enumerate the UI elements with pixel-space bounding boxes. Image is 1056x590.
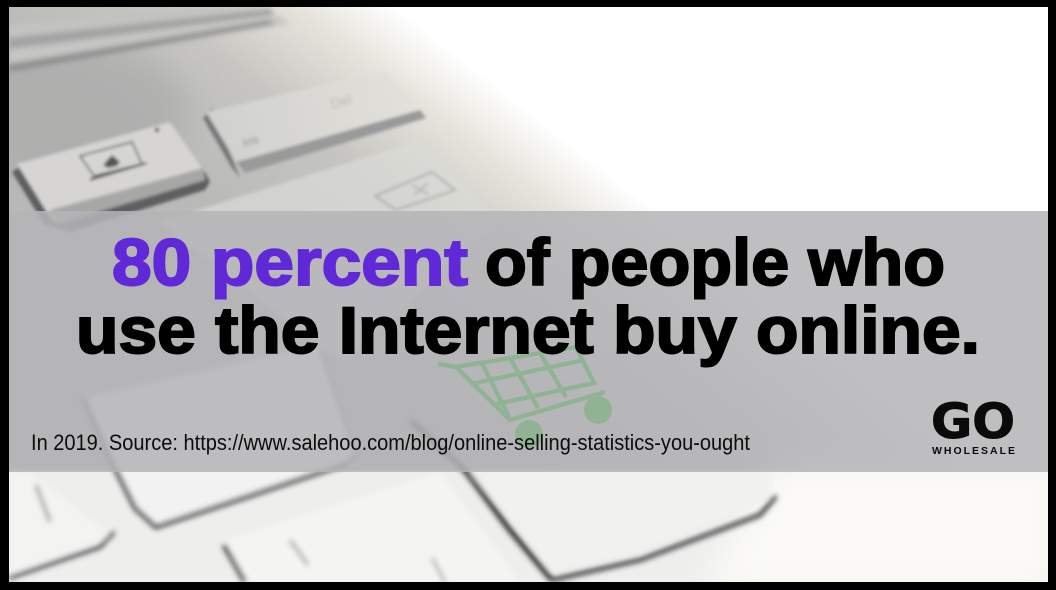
keyboard keys [9, 71, 776, 582]
key: lower left [9, 472, 114, 578]
key: screen toggle [12, 122, 210, 232]
logo: GO Wholesale: WHOLESALE [932, 445, 1015, 457]
icon: shopping cart printed on key [438, 347, 612, 448]
logo: GO Wholesale: GO [931, 394, 1015, 450]
heading line 1 emphasis: 80 percent [112, 225, 468, 299]
heading line 2: use the Internet buy online. [76, 293, 980, 367]
key: Ins Del: Del [328, 91, 353, 112]
key: enter edge [410, 420, 776, 580]
key: Ins Del: Ins [241, 132, 260, 150]
key: Ins Del [202, 88, 427, 177]
speaker slots [9, 7, 290, 72]
translucent text band [9, 211, 1048, 472]
key: backspace [194, 151, 472, 211]
heading line 1 remainder: of people who [485, 225, 945, 299]
key: lower left band keys [110, 470, 342, 533]
source note: In 2019. Source: https://www.salehoo.com/blog/online-selling-statistics-you-ought [31, 430, 750, 455]
heading [76, 225, 980, 367]
key: pound [219, 539, 446, 582]
